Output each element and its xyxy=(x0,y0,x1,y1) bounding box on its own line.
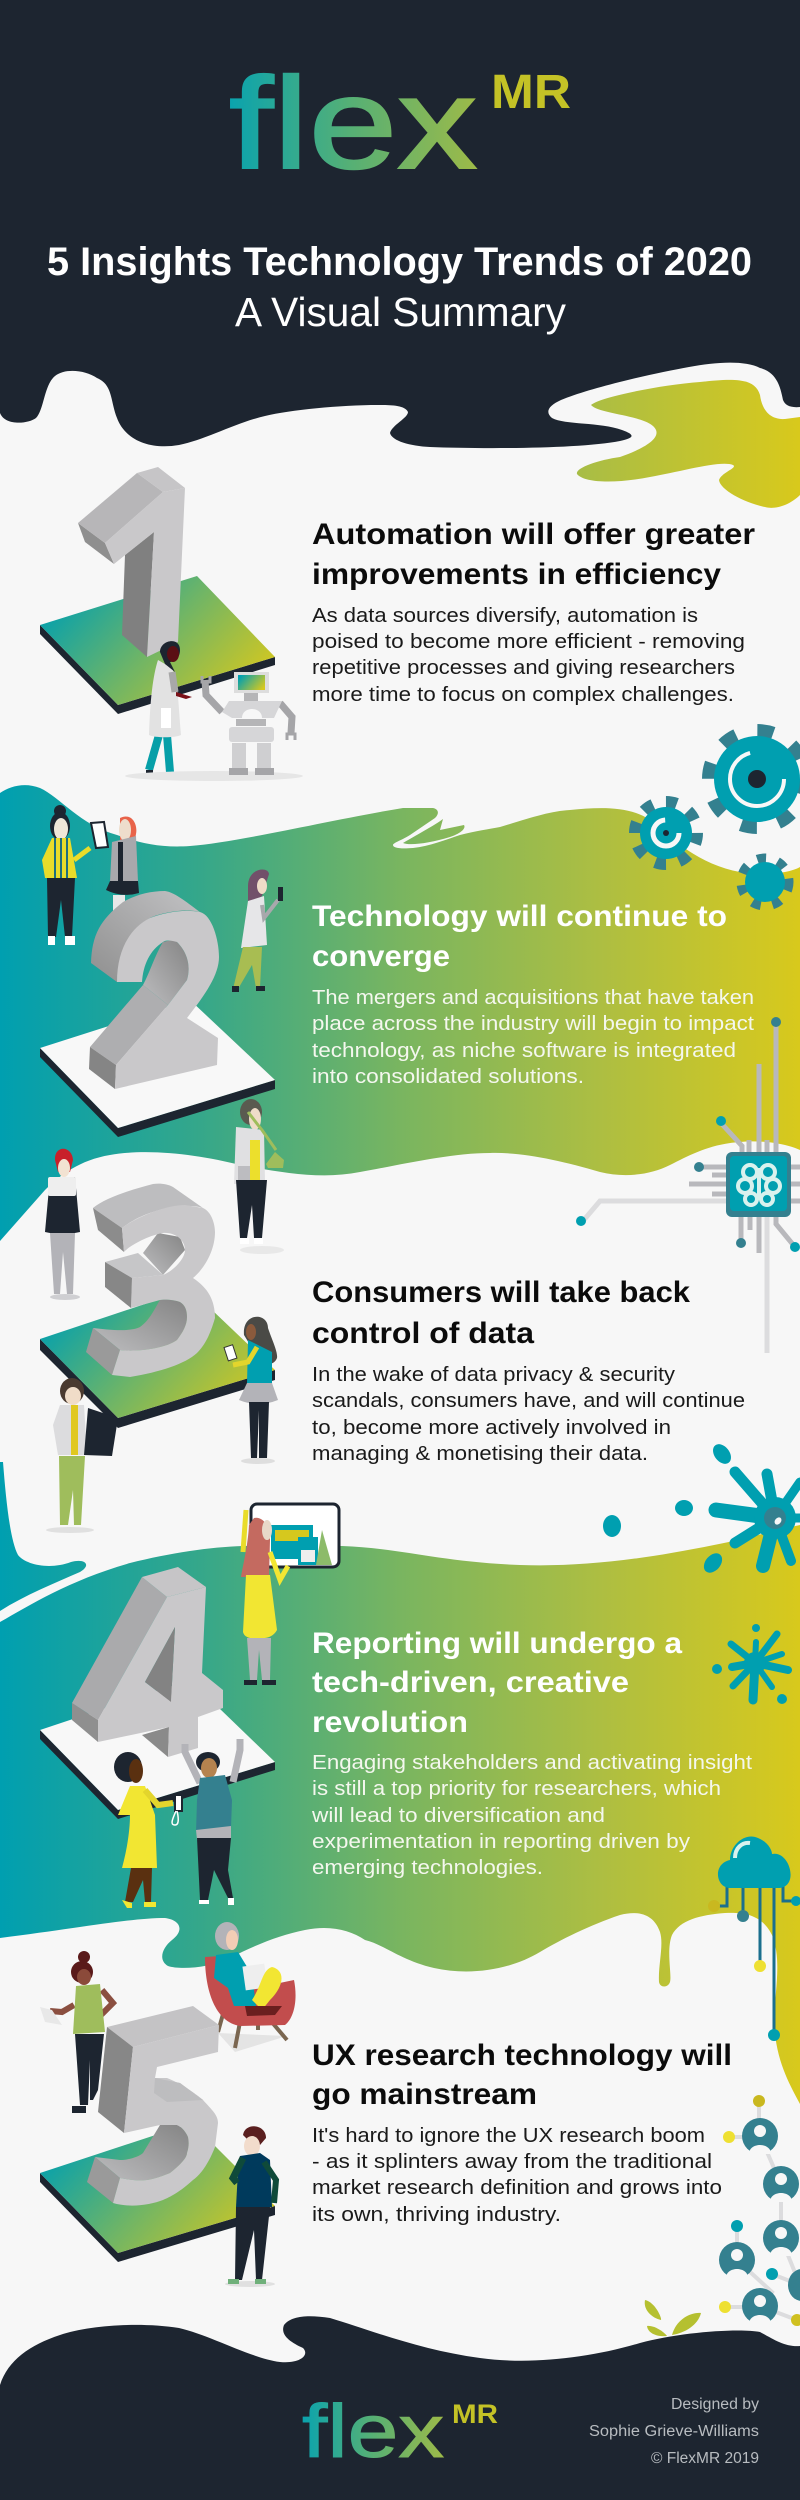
body text 2: place across the industry will begin to impact xyxy=(312,1013,754,1035)
person on the phone xyxy=(234,1099,284,1254)
heading 5: go mainstream xyxy=(312,2078,537,2111)
body text 3: to, become more actively involved in xyxy=(312,1417,671,1439)
heading 2: converge xyxy=(312,940,450,973)
number 2 xyxy=(89,891,219,1089)
person with raised arms xyxy=(185,1739,240,1905)
body text 3: In the wake of data privacy & security xyxy=(312,1364,675,1386)
icon: brain chip xyxy=(576,1017,800,1353)
logo: flexMR: MR xyxy=(491,66,571,119)
icon: leaves xyxy=(645,2300,701,2336)
person with folder xyxy=(46,1378,118,1533)
body text 2: into consolidated solutions. xyxy=(312,1066,584,1088)
icon: teal splat xyxy=(603,1441,800,1576)
heading 5 xyxy=(312,2039,732,2111)
person with screen xyxy=(241,1504,339,1685)
heading 2: Technology will continue to xyxy=(312,900,727,933)
number 5 xyxy=(87,2006,219,2206)
body text 5 xyxy=(312,2125,722,2226)
body text 2 xyxy=(312,987,754,1088)
footer logo: MR xyxy=(452,2399,498,2429)
body text 2: The mergers and acquisitions that have taken xyxy=(312,987,754,1009)
body text 4: emerging technologies. xyxy=(312,1857,543,1879)
body text 3: managing & monetising their data. xyxy=(312,1443,648,1465)
person with red hair and laptop xyxy=(45,1149,80,1300)
number 4 xyxy=(72,1567,223,1757)
body text 3: scandals, consumers have, and will continue xyxy=(312,1390,745,1412)
number 1 xyxy=(78,467,185,657)
heading 4: tech-driven, creative xyxy=(312,1666,629,1699)
body text 1 xyxy=(312,605,745,706)
platform 5 xyxy=(40,2123,275,2262)
person in red armchair xyxy=(205,1922,296,2052)
body text 2: technology, as niche software is integrated xyxy=(312,1040,736,1062)
icon: people network xyxy=(719,2095,800,2326)
heading 3 xyxy=(312,1276,690,1350)
scientist figure xyxy=(146,641,192,776)
body text 4: experimentation in reporting driven by xyxy=(312,1831,690,1853)
heading 1 xyxy=(312,518,755,591)
footer credits: Designed by xyxy=(671,2396,759,2413)
green island in band notch xyxy=(403,819,464,844)
footer dark wave xyxy=(0,2316,800,2500)
body text 4: Engaging stakeholders and activating insight xyxy=(312,1752,752,1774)
body text 4: will lead to diversification and xyxy=(311,1805,605,1827)
icon: gears xyxy=(635,731,800,906)
body text 5: - as it splinters away from the traditional xyxy=(312,2151,712,2173)
platform 3 xyxy=(40,1289,275,1428)
panel 4 gradient band xyxy=(0,1462,800,2104)
body text 5: its own, thriving industry. xyxy=(312,2204,561,2226)
heading 4: revolution xyxy=(312,1706,468,1739)
heading 1: Automation will offer greater xyxy=(312,518,755,551)
body text 4: is still a top priority for researchers, which xyxy=(312,1778,721,1800)
footer credits: © FlexMR 2019 xyxy=(651,2450,759,2467)
icon: cloud with wires xyxy=(708,1837,800,2041)
person in navy sweater xyxy=(225,2126,276,2287)
footer logo: flex xyxy=(302,2389,444,2473)
heading 5: UX research technology will xyxy=(312,2039,732,2072)
platform 4 xyxy=(40,1680,275,1819)
body text 4 xyxy=(311,1752,752,1879)
heading 2 xyxy=(312,900,727,973)
person with long hair and phone xyxy=(224,1317,278,1464)
heading 3: control of data xyxy=(312,1317,534,1350)
body text 5: It's hard to ignore the UX research boom xyxy=(312,2125,705,2147)
person in yellow dress xyxy=(114,1752,182,1908)
body text 5: market research definition and grows into xyxy=(312,2177,722,2199)
body text 1: As data sources diversify, automation is xyxy=(312,605,698,627)
panel 2 gradient band xyxy=(0,785,800,1241)
yellow blob top right xyxy=(577,380,800,508)
person with phone xyxy=(232,870,283,992)
robot figure xyxy=(125,672,303,781)
subtitle: A Visual Summary xyxy=(235,289,566,335)
heading 4 xyxy=(312,1627,682,1739)
body text 1: repetitive processes and giving researchers xyxy=(312,657,735,679)
header dark wave xyxy=(0,0,800,448)
logo: flexMR: flex xyxy=(229,50,477,196)
body text 1: more time to focus on complex challenges. xyxy=(312,684,734,706)
person with tablet xyxy=(91,816,139,915)
heading 4: Reporting will undergo a xyxy=(312,1627,682,1660)
logo: flexMR xyxy=(229,50,571,196)
body text 1: poised to become more efficient - removing xyxy=(312,631,745,653)
footer credits: Sophie Grieve-Williams xyxy=(589,2423,759,2440)
heading 1: improvements in efficiency xyxy=(312,558,721,591)
platform 2 xyxy=(40,1000,275,1137)
footer logo xyxy=(302,2389,498,2473)
person with yellow stripes xyxy=(42,805,90,945)
icon: small splat xyxy=(712,1624,788,1704)
heading 3: Consumers will take back xyxy=(312,1276,690,1309)
footer credits xyxy=(589,2396,759,2467)
title: 5 Insights Technology Trends of 2020 xyxy=(47,240,752,284)
body text 3 xyxy=(312,1364,745,1465)
platform 1 xyxy=(40,576,275,714)
person standing with paper xyxy=(40,1951,113,2113)
number 3 xyxy=(86,1184,215,1377)
